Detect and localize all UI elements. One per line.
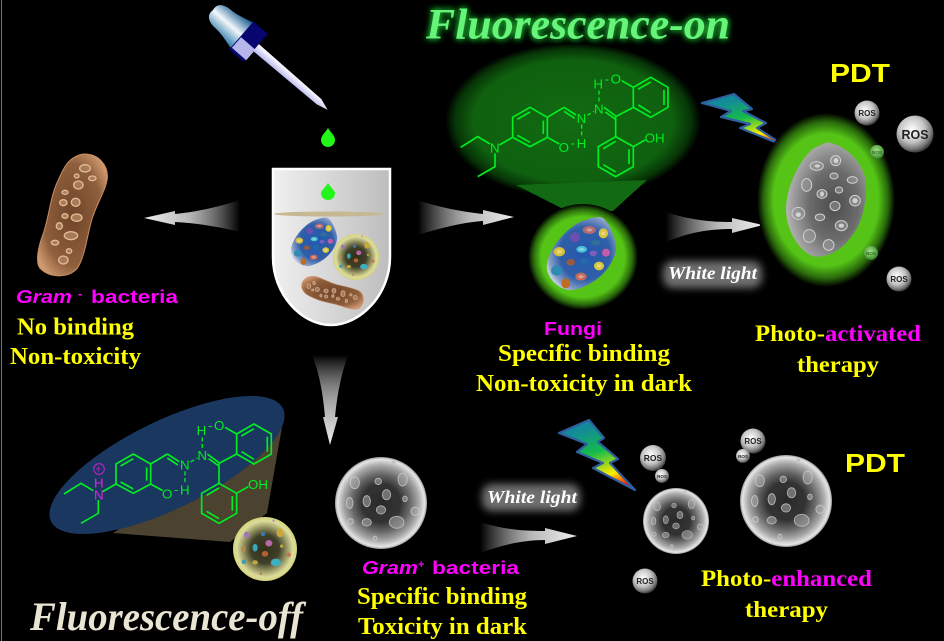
text: no binding [10, 314, 141, 370]
text: photo-activated therapy [755, 321, 921, 377]
ROS sphere [640, 445, 666, 471]
yellow bacterium [333, 234, 379, 280]
molecule: protonated probe: - [208, 418, 212, 433]
ROS green sphere: ROS [866, 251, 876, 256]
molecule: protonated probe: N [180, 458, 190, 473]
arrow: to fungi [418, 200, 514, 235]
molecule: protonated probe: + [95, 464, 101, 475]
ROS sphere: ROS [890, 275, 908, 284]
molecule: protonated probe: H [197, 423, 206, 438]
molecule: protonated probe: N [94, 487, 104, 502]
molecule: neutral probe: H [577, 136, 586, 151]
ROS small sphere [736, 449, 750, 463]
text: photo-activated therapy: therapy [797, 352, 880, 377]
panel: protonated molecule backdrop [32, 369, 302, 561]
label: white light top [663, 261, 762, 288]
molecule: protonated probe: O [214, 418, 224, 433]
molecule: neutral probe: - [571, 135, 575, 150]
ROS sphere: ROS [744, 437, 762, 446]
text: specific binding non-toxicity in dark: Non-toxicity in dark [476, 371, 693, 397]
molecule: protonated probe: H [94, 475, 104, 490]
ROS green sphere [870, 145, 884, 159]
arrow: to gram-positive bacteria [312, 355, 348, 445]
ROS small sphere: ROS [657, 474, 667, 479]
small yellow bacterium [233, 517, 297, 581]
large bacterium under light [740, 455, 832, 547]
ROS sphere [632, 568, 658, 594]
ROS sphere [854, 100, 880, 126]
ROS small sphere: ROS [738, 454, 748, 459]
label: gram-positive: bacteria [432, 558, 520, 578]
ROS sphere: ROS [644, 453, 663, 463]
molecule: protonated probe: O [162, 487, 172, 502]
molecule: protonated probe: N [197, 448, 207, 463]
molecule: neutral probe: OH [645, 130, 665, 145]
arrow: fungi white light [666, 212, 763, 242]
icon: lightning bolt top [702, 94, 785, 146]
panel: green molecule glow [445, 43, 701, 211]
fungus with green glow [528, 204, 638, 310]
text: photo-enhanced therapy [701, 566, 872, 622]
label: gram-negative: - [78, 286, 82, 301]
text: specific binding toxicity in dark: Toxicity in dark [358, 614, 528, 640]
ROS sphere [886, 266, 912, 292]
brown bacterium [301, 276, 364, 309]
label: PDT top: PDT [830, 58, 890, 88]
arrow: gram-positive white light [480, 522, 577, 553]
label: gram-positive [362, 558, 520, 578]
text: no binding: No binding [17, 314, 134, 340]
label: fungi: Fungi [544, 319, 602, 339]
label: white light bottom [482, 484, 580, 511]
ROS green sphere [864, 246, 878, 260]
ROS green sphere: ROS [872, 150, 882, 155]
ROS sphere [740, 428, 766, 454]
molecule: protonated probe: - [174, 482, 178, 497]
ROS spheres bottom [632, 428, 766, 594]
tube drop [321, 183, 335, 200]
ROS sphere large [896, 116, 934, 152]
text: specific binding toxicity in dark: Specific binding [357, 584, 527, 610]
ROS sphere large: ROS [901, 128, 929, 142]
ROS spheres top [854, 100, 934, 292]
label: gram-negative: bacteria [91, 287, 179, 307]
blue fungus cell [291, 217, 337, 266]
molecule: neutral probe: N [490, 141, 500, 156]
text: photo-enhanced therapy: therapy [745, 597, 829, 622]
small bacterium under light [643, 488, 709, 554]
molecule: neutral probe: N [594, 101, 604, 116]
label: gram-negative [16, 286, 179, 307]
text: no binding: Non-toxicity [10, 344, 141, 370]
molecule: neutral probe: - [605, 71, 609, 86]
gram-positive bacterium [335, 457, 427, 549]
label: white light bottom: White light [487, 487, 578, 507]
molecule: neutral probe: O [559, 140, 569, 155]
icon: dropper [200, 0, 339, 124]
label: PDT bottom: PDT [845, 448, 905, 478]
label: gram-positive: Gram [362, 558, 418, 578]
activated fungus with glow [757, 113, 895, 287]
title: fluorescence-off: Fluorescence-off [29, 594, 307, 639]
liquid surface [274, 212, 384, 216]
label: gram-negative: Gram [16, 287, 72, 307]
arrow: to gram-negative bacteria [144, 200, 240, 232]
molecule: protonated probe [64, 418, 271, 523]
molecule: neutral probe [461, 71, 668, 177]
molecule: neutral probe: N [577, 111, 586, 126]
ROS small sphere [655, 469, 669, 483]
molecule: protonated probe: H [180, 483, 190, 498]
ROS sphere: ROS [636, 577, 654, 586]
text: photo-enhanced therapy: Photo-enhanced [701, 566, 872, 591]
text: specific binding non-toxicity in dark [476, 341, 693, 397]
label: white light top: White light [668, 263, 758, 283]
text: photo-activated therapy: Photo-activated [755, 321, 921, 346]
gram-negative bacterium [38, 154, 107, 276]
tube body [273, 169, 390, 325]
molecule: protonated probe: OH [248, 477, 268, 492]
icon: falling green drop [321, 128, 335, 147]
text: specific binding non-toxicity in dark: Specific binding [498, 341, 670, 367]
icon: lightning bolt bottom [559, 420, 635, 490]
text: specific binding toxicity in dark [357, 584, 528, 640]
label: gram-positive: + [418, 559, 424, 571]
molecule: neutral probe: H [593, 76, 603, 91]
title: fluorescence-on: Fluorescence-on [425, 2, 730, 48]
test tube containing organisms [273, 169, 390, 325]
molecule: neutral probe: O [611, 71, 621, 86]
ROS sphere: ROS [858, 109, 876, 118]
